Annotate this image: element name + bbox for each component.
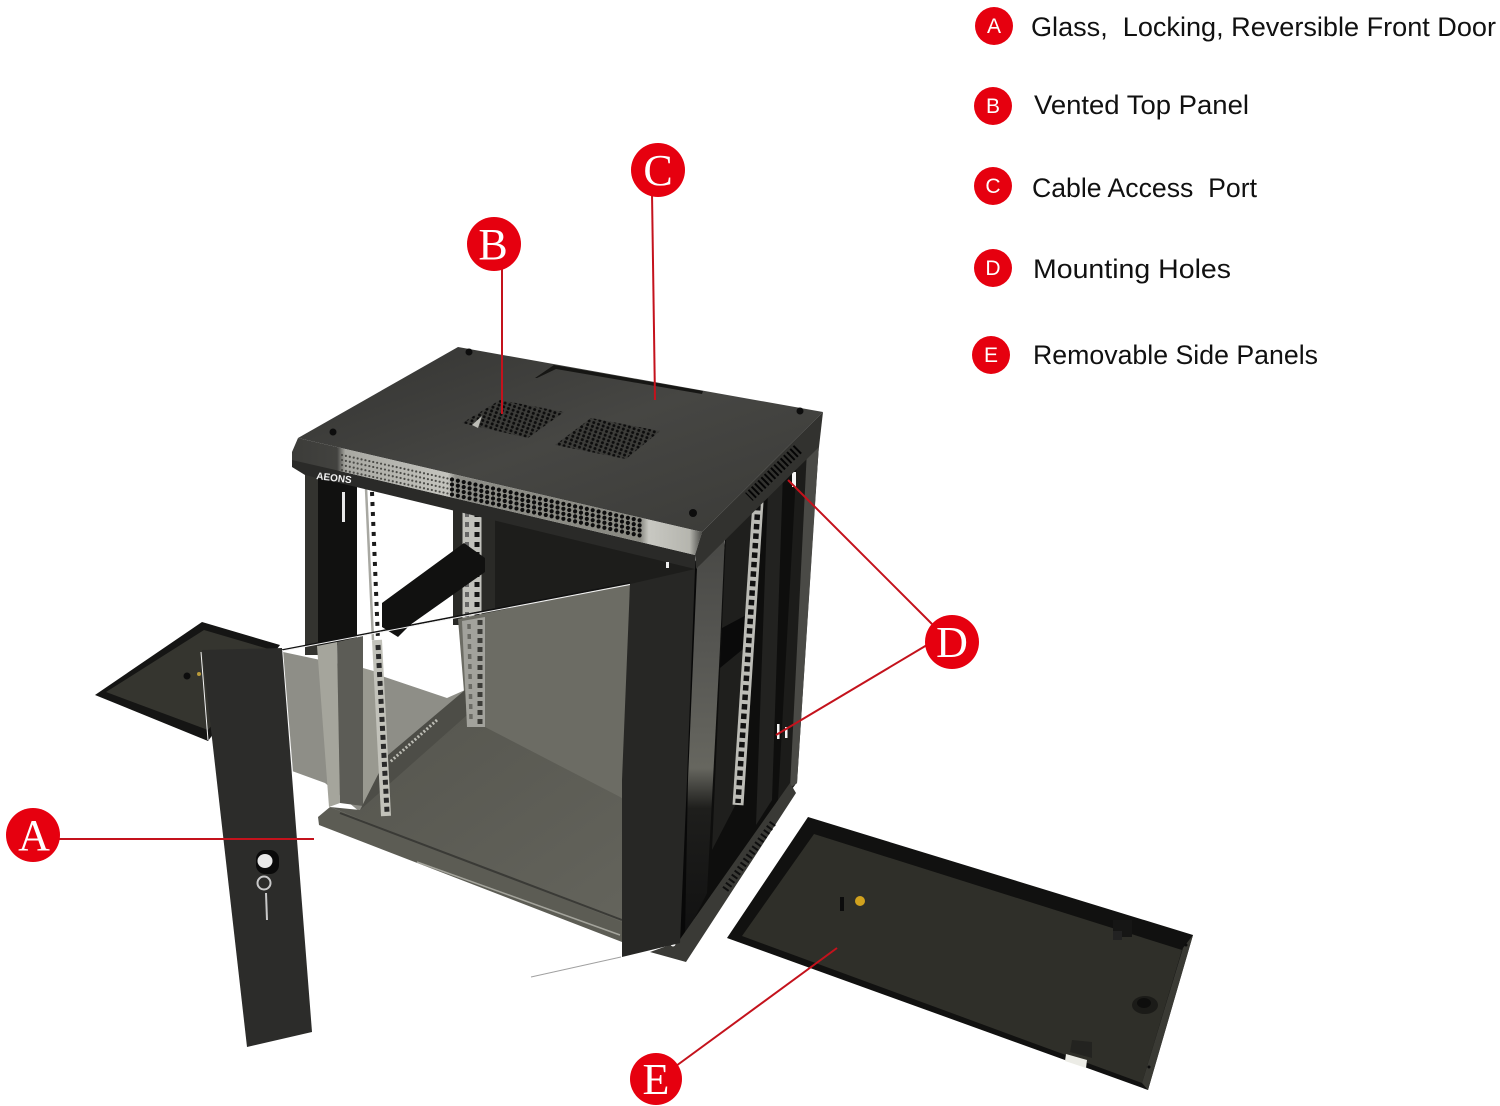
callout D: D <box>936 618 968 667</box>
brand: AEONS <box>316 471 353 486</box>
small holes <box>1148 944 1188 1068</box>
front post <box>685 535 725 937</box>
latch detail <box>1113 931 1122 940</box>
rear panel through door <box>283 652 466 812</box>
rear slot glint <box>666 562 669 568</box>
large perforations <box>452 480 640 536</box>
latch bracket <box>1113 920 1132 937</box>
legend <box>972 7 1496 374</box>
rail holes <box>378 645 387 812</box>
upper mounting slot <box>792 472 796 487</box>
rear wall <box>482 515 696 625</box>
legend item D: Mounting Holes <box>1033 254 1231 284</box>
base rail <box>650 783 796 962</box>
lower mounting holes <box>777 724 788 739</box>
legend item E <box>972 336 1318 374</box>
legend item C <box>974 167 1257 205</box>
label <box>1065 1054 1087 1068</box>
rack rail through door <box>377 640 386 816</box>
top panel <box>292 347 823 569</box>
mounting bracket <box>382 543 485 637</box>
grommet <box>1132 996 1158 1014</box>
callout E <box>630 948 837 1105</box>
label notch <box>1070 1040 1092 1058</box>
side vent slots <box>749 449 798 497</box>
lower diagonal bar <box>360 690 467 815</box>
side band <box>695 412 823 569</box>
right side of cabinet <box>650 440 819 962</box>
door lock stile <box>201 648 312 1047</box>
legend item B: Vented Top Panel <box>1034 90 1249 120</box>
glass bottom edge <box>531 957 621 977</box>
rear wall in opening <box>712 510 752 850</box>
base vents <box>725 823 773 890</box>
left rack rail upper <box>366 488 378 640</box>
post right strip <box>363 668 380 806</box>
grommet centre <box>1137 998 1151 1008</box>
left front post inner <box>318 476 357 650</box>
rear wall through door <box>458 583 630 800</box>
callout E: E <box>643 1055 669 1104</box>
front band <box>292 438 702 555</box>
post dark strip <box>337 636 363 806</box>
key <box>258 876 270 920</box>
door plinth <box>318 807 622 942</box>
callout C <box>631 143 685 400</box>
side rack rail <box>738 502 758 805</box>
legend item C: C <box>985 175 1001 198</box>
legend item A: Glass, Locking, Reversible Front Door <box>1031 12 1496 42</box>
mid rail through door <box>462 617 485 727</box>
glass top edge <box>282 583 630 650</box>
mid rack rail upper <box>467 510 477 625</box>
bar vents <box>390 720 437 762</box>
glass top edge highlight <box>282 584 630 651</box>
legend item B <box>974 87 1249 125</box>
side outer post <box>778 440 819 800</box>
vent glare <box>472 416 482 428</box>
floor <box>330 716 626 925</box>
lock <box>256 850 279 874</box>
callout B: B <box>478 220 508 269</box>
legend item B: B <box>986 95 1000 118</box>
cable access port <box>535 365 703 394</box>
legend item E: Removable Side Panels <box>1033 340 1318 370</box>
callout A <box>6 808 314 862</box>
glass view of interior <box>282 583 630 977</box>
bolt <box>840 897 844 911</box>
callout D <box>776 480 979 735</box>
legend item C: Cable Access Port <box>1032 173 1257 203</box>
band underside <box>292 455 695 569</box>
left front post outer <box>305 473 318 655</box>
white slit on post <box>342 492 345 522</box>
mid rail holes inner <box>469 624 471 720</box>
corner screws <box>330 348 804 517</box>
right rim <box>1142 935 1193 1090</box>
column <box>756 472 783 825</box>
door frame gap <box>678 560 698 943</box>
outer post edge <box>790 444 819 788</box>
yellow screw <box>855 896 865 906</box>
base screw <box>670 942 676 946</box>
fine silver mesh <box>342 455 450 494</box>
left removed side panel <box>95 622 280 741</box>
vent B <box>462 400 564 438</box>
callout A: A <box>18 811 50 860</box>
rear post <box>453 505 495 625</box>
plinth highlight <box>417 862 620 935</box>
vent second <box>555 418 660 459</box>
post light strip <box>317 642 340 807</box>
callout B <box>467 217 521 414</box>
cross bar <box>720 612 752 668</box>
cabinet back structure above glass <box>305 473 696 655</box>
callout C: C <box>643 146 673 195</box>
glass left edge <box>282 650 292 772</box>
legend item D <box>974 249 1231 287</box>
door hinge stile <box>622 569 695 957</box>
legend item A: A <box>987 15 1001 38</box>
legend item D: D <box>985 257 1001 280</box>
side opening <box>675 445 819 945</box>
legend item E: E <box>984 344 998 367</box>
lock face <box>258 854 272 868</box>
mid rail holes <box>478 620 482 724</box>
plinth shadow <box>340 813 622 920</box>
removed side panel E <box>727 817 1193 1090</box>
